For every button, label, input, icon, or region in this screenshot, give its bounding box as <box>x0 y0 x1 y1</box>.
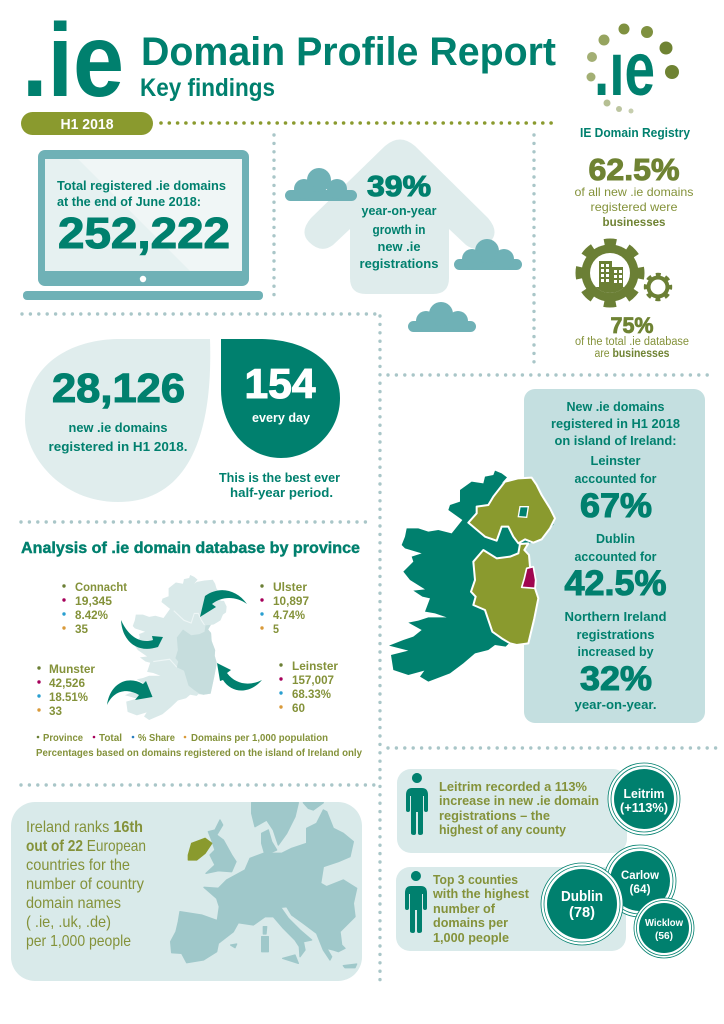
province data: Ulster: 4.74% <box>273 608 305 622</box>
panel: 154 every day: every day <box>252 410 311 425</box>
panel: 154 every day <box>221 339 340 458</box>
province data: Munster: Munster <box>49 662 95 676</box>
Leitrim text: increase in new .ie domain <box>439 793 599 808</box>
title block <box>22 3 556 119</box>
panel: island of Ireland stats: Northern Ireland <box>564 609 667 624</box>
province data: Munster <box>37 662 95 718</box>
growth arrow with clouds: year-on-year <box>362 203 436 218</box>
total domains label: Total registered .ie domains <box>57 178 226 193</box>
Leitrim text: Leitrim recorded a 113% <box>439 779 587 794</box>
panel: island of Ireland stats: year-on-year. <box>574 697 656 712</box>
province data: Connacht: 35 <box>75 622 88 636</box>
ranking text: ( .ie, .uk, .de) <box>26 914 111 931</box>
stat: 62.5% businesses: businesses <box>602 215 666 229</box>
badge: Leitrim +113%: Leitrim <box>624 787 664 801</box>
period pill: H1 2018: H1 2018 <box>60 116 114 133</box>
stat: 32%: 32% <box>580 660 652 698</box>
ranking text <box>26 819 146 950</box>
map: Europe <box>171 803 357 968</box>
ranking text: number of country <box>26 876 144 893</box>
top counties text: with the highest <box>432 886 530 901</box>
logo: IE Domain Registry <box>580 24 690 140</box>
panel: island of Ireland stats: registered in H1 2018 <box>551 416 680 431</box>
arrow: Connacht <box>121 620 163 649</box>
legend: % Share <box>138 732 175 744</box>
panel: island of Ireland stats: accounted for <box>574 549 656 564</box>
top counties text: domains per <box>433 915 508 930</box>
legend: Percentages based on domains registered on the island of Ireland only <box>36 747 362 759</box>
province data: Ulster <box>260 580 309 636</box>
province data: Munster: 42,526 <box>49 676 85 690</box>
heading: Domain Profile Report: Domain Profile Report <box>141 30 556 74</box>
arrow: Leinster <box>217 663 262 690</box>
stat: 62.5% businesses: registered were <box>590 200 678 214</box>
panel: island of Ireland stats: on island of Ireland: <box>554 433 676 448</box>
icon: cloud bottom <box>408 302 476 332</box>
map: provinces of Ireland <box>107 575 262 720</box>
panel: top 3 counties <box>396 867 626 951</box>
icon: cloud left <box>285 168 357 201</box>
province data: Ulster: Ulster <box>273 580 307 594</box>
icon: person <box>406 773 428 835</box>
subheading: Key findings: Key findings <box>140 74 275 102</box>
badge: Dublin 78 <box>541 863 623 945</box>
stat: 75% businesses: are businesses <box>594 348 670 360</box>
Leitrim text: registrations – the <box>439 808 550 823</box>
province data: Leinster: Leinster <box>292 659 338 673</box>
province data: Connacht: 19,345 <box>75 594 112 608</box>
province data: Ulster: 5 <box>273 622 279 636</box>
badge: Wicklow 56: (56) <box>655 931 673 942</box>
badge: Dublin 78: Dublin <box>561 888 603 905</box>
growth arrow with clouds: registrations <box>360 256 438 271</box>
stat: 75% businesses: 75% <box>610 313 654 338</box>
panel: new domains 28,126: new .ie domains <box>68 420 168 435</box>
ranking text: domain names <box>26 895 121 912</box>
arrow: Ulster <box>200 590 247 617</box>
province data: Leinster: 60 <box>292 701 305 715</box>
legend <box>36 732 362 759</box>
stat: 62.5% businesses <box>574 152 694 229</box>
logo: IE Domain Registry: IE Domain Registry <box>580 126 690 140</box>
map: Ireland highlighting Leinster and Dublin <box>389 471 555 682</box>
badge: Carlow 64 <box>604 845 676 917</box>
panel: Leitrim increase <box>397 769 627 853</box>
panel: new domains 28,126: registered in H1 2018. <box>48 439 188 454</box>
stat: 67%: 67% <box>580 487 652 525</box>
province data: Munster: 33 <box>49 704 62 718</box>
top counties text: 1,000 people <box>433 930 509 945</box>
stat: 62.5% businesses: 62.5% <box>588 152 680 187</box>
province data: Ulster: 10,897 <box>273 594 309 608</box>
badge: Wicklow 56: Wicklow <box>645 918 683 929</box>
arrow: Munster <box>107 680 152 705</box>
province data: Connacht <box>62 580 127 636</box>
badge: Carlow 64: (64) <box>630 882 650 896</box>
panel: island of Ireland stats: New .ie domains <box>566 399 664 414</box>
badge: Leitrim +113%: (+113%) <box>620 801 668 815</box>
stat: 62.5% businesses: of all new .ie domains <box>574 185 694 199</box>
badge: Carlow 64: Carlow <box>621 868 660 882</box>
panel: 154 every day: 154 <box>244 360 316 407</box>
panel: island of Ireland stats: accounted for <box>574 471 656 486</box>
panel: new domains 28,126: 28,126 <box>52 365 185 411</box>
stat: 75% businesses: of the total .ie database <box>575 336 689 348</box>
stat: 42.5%: 42.5% <box>564 564 666 603</box>
badge: Leitrim +113% <box>608 763 680 835</box>
panel: island of Ireland stats: increased by <box>578 644 654 659</box>
province data: Leinster <box>279 659 338 715</box>
legend: Total <box>99 732 122 744</box>
stat: 75% businesses <box>575 313 689 360</box>
ranking text: countries for the <box>26 857 130 874</box>
text: best ever half-year <box>219 470 340 500</box>
text: best ever half-year: This is the best ever <box>219 470 340 485</box>
icon: laptop with total domains <box>23 150 263 300</box>
heading: analysis by province: Analysis of .ie domain database by province <box>21 540 360 557</box>
Leitrim text: highest of any county <box>439 822 567 837</box>
badge: Dublin 78: (78) <box>569 904 595 921</box>
panel: island of Ireland stats <box>524 389 705 723</box>
total domains value: 252,222 <box>58 209 230 258</box>
panel: island of Ireland stats: registrations <box>576 627 654 642</box>
Leitrim text <box>439 779 599 837</box>
province data: Munster: 18.51% <box>49 690 88 704</box>
province data: Connacht: Connacht <box>75 580 127 594</box>
icon: person <box>405 871 427 933</box>
panel: island of Ireland stats: Leinster <box>590 453 640 468</box>
panel: island of Ireland stats: Dublin <box>596 531 635 546</box>
icon: gears with building <box>579 242 670 304</box>
province data: Leinster: 157,007 <box>292 673 334 687</box>
panel: Ireland ranks in Europe <box>11 802 362 981</box>
ranking text: out of 22 European <box>26 838 146 855</box>
province data: Leinster: 68.33% <box>292 687 331 701</box>
badge: Wicklow 56 <box>634 898 694 958</box>
panel: new domains 28,126 <box>25 339 210 502</box>
growth stat: 39% <box>367 171 431 203</box>
top counties text: number of <box>433 901 496 916</box>
period pill: H1 2018 <box>21 112 153 135</box>
ranking text: per 1,000 people <box>26 933 131 950</box>
logo: IE Domain Registry: .ıe <box>594 27 655 112</box>
top counties text <box>432 872 530 945</box>
top counties text: Top 3 counties <box>433 872 518 887</box>
legend: Province <box>43 732 83 744</box>
text: best ever half-year: half-year period. <box>230 485 333 500</box>
legend: Domains per 1,000 population <box>191 732 328 744</box>
icon: laptop with total domains: at the end of June 2018: <box>57 194 201 209</box>
province data: Connacht: 8.42% <box>75 608 108 622</box>
growth arrow with clouds: new .ie <box>378 239 420 254</box>
ranking text: Ireland ranks 16th <box>26 819 143 836</box>
icon: cloud right <box>454 239 522 270</box>
growth arrow with clouds <box>285 140 522 332</box>
big .ie mark: .ie <box>22 3 124 119</box>
growth arrow with clouds: growth in <box>372 222 426 237</box>
